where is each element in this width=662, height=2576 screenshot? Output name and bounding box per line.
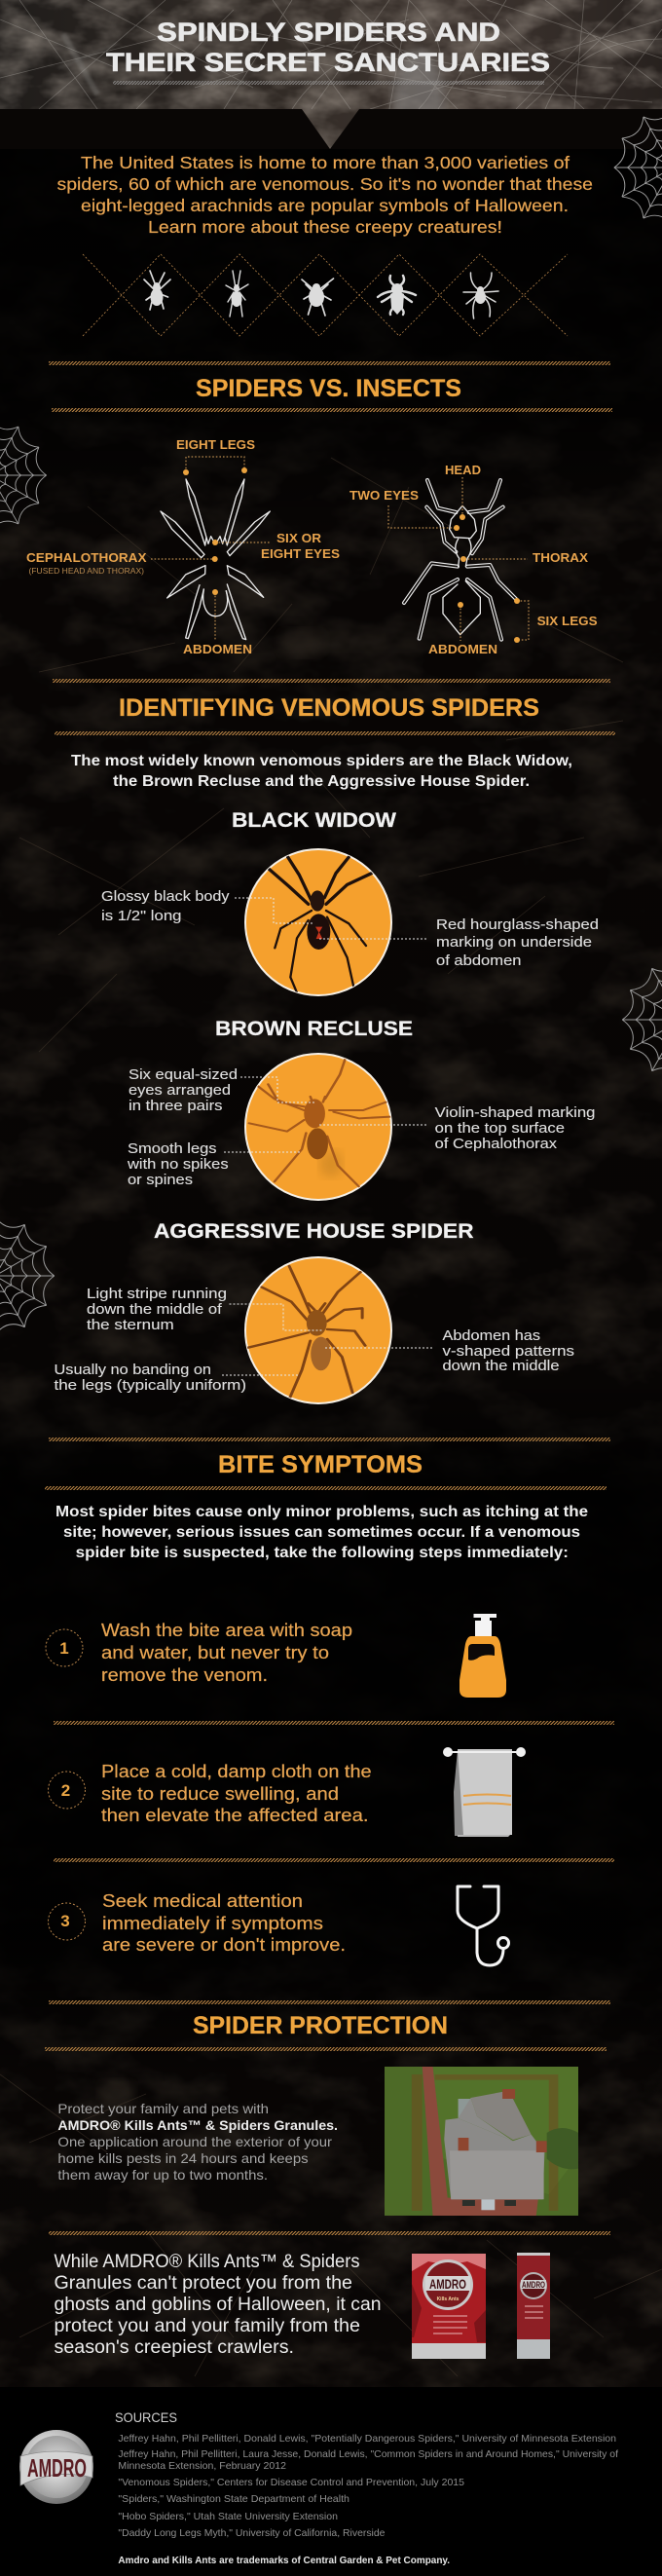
spider labels: (FUSED HEAD AND THORAX)	[29, 566, 144, 576]
ant labels	[349, 464, 598, 656]
callout: body: is 1/2" long	[101, 909, 181, 924]
step 2 text: Place a cold, damp cloth on the	[101, 1761, 372, 1781]
callout: hourglass: of abdomen	[436, 953, 522, 969]
sources list: "Spiders," Washington State Department of Health	[118, 2493, 349, 2505]
callout: legs: or spines	[128, 1173, 193, 1188]
callout: abdomen: down the middle	[442, 1359, 559, 1374]
header cobweb photo	[0, 0, 662, 156]
number badge 3: 3	[60, 1912, 70, 1930]
sources list: "Daddy Long Legs Myth," University of California, Riverside	[118, 2527, 386, 2539]
panel: black widow	[101, 809, 599, 995]
icon: spider 3	[302, 279, 333, 316]
trademark note: Amdro and Kills Ants are trademarks of Central Garden & Pet Company.	[118, 2555, 450, 2566]
icon: spider 5	[463, 273, 498, 318]
title	[106, 18, 550, 77]
product: granules bag: AMDRO	[429, 2276, 466, 2292]
step 1	[46, 1614, 506, 1698]
spider labels: SIX OR	[276, 532, 321, 545]
step 2	[49, 1747, 526, 1837]
intro text: Learn more about these creepy creatures!	[148, 217, 502, 237]
sources list: Jeffrey Hahn, Phil Pellitteri, Laura Jesse, Donald Lewis, "Common Spiders in and Around Homes," University of	[118, 2448, 618, 2460]
callout: violin marking: on the top surface	[435, 1121, 565, 1137]
callout: abdomen	[442, 1328, 574, 1374]
ant labels: THORAX	[533, 551, 589, 565]
icon: soap bottle	[460, 1614, 506, 1698]
callout: violin marking: of Cephalothorax	[435, 1137, 558, 1152]
sources list: SOURCES	[115, 2409, 177, 2425]
step 3	[49, 1886, 508, 1965]
callout: stripe	[87, 1287, 227, 1333]
callout: banding: Usually no banding on	[55, 1363, 211, 1378]
ant labels: HEAD	[445, 464, 481, 477]
sources list: "Venomous Spiders," Centers for Disease Control and Prevention, July 2015	[118, 2477, 464, 2488]
photo: black widow in circle	[245, 849, 391, 995]
argyle spider icon row	[83, 254, 568, 336]
venomous spiders intro: the Brown Recluse and the Aggressive House Spider.	[113, 773, 530, 790]
intro text	[56, 153, 593, 237]
icon: stethoscope	[458, 1886, 508, 1965]
heading: identifying venomous spiders: IDENTIFYING VENOMOUS SPIDERS	[119, 694, 539, 722]
sources list: Minnesota Extension, February 2012	[118, 2460, 286, 2472]
step 3 text: Seek medical attention	[102, 1890, 303, 1911]
step 2 text	[101, 1761, 372, 1825]
bite symptoms intro: Most spider bites cause only minor problems, such as itching at the	[55, 1504, 588, 1520]
product: shaker canister: AMDRO	[522, 2280, 545, 2290]
closing message	[55, 2252, 382, 2358]
spider labels: EIGHT EYES	[261, 547, 340, 561]
aerial house photo	[385, 2067, 578, 2216]
venomous spiders intro	[71, 753, 572, 790]
bite symptoms intro: site; however, serious issues can sometimes occur. If a venomous	[63, 1524, 580, 1541]
leader lines	[222, 1304, 434, 1375]
callout: abdomen: Abdomen has	[442, 1328, 540, 1344]
title: SPINDLY SPIDERS AND	[157, 18, 500, 47]
heading: black widow: BLACK WIDOW	[232, 809, 396, 832]
callout: eyes: Six equal-sized	[129, 1067, 238, 1083]
closing message: ghosts and goblins of Halloween, it can	[55, 2295, 382, 2315]
sources list: Jeffrey Hahn, Phil Pellitteri, Donald Lewis, "Potentially Dangerous Spiders," University of Minnesota Extension	[118, 2433, 616, 2445]
photo: house spider in circle	[242, 1257, 391, 1403]
heading: spider protection: SPIDER PROTECTION	[193, 2012, 448, 2039]
heading: spiders vs insects: SPIDERS VS. INSECTS	[196, 375, 461, 402]
closing message: Granules can't protect you from the	[55, 2273, 352, 2294]
closing message: season's creepiest crawlers.	[55, 2337, 294, 2358]
intro text: eight-legged arachnids are popular symbols of Halloween.	[81, 196, 569, 215]
heading: brown recluse: BROWN RECLUSE	[215, 1018, 413, 1040]
number badge 1	[46, 1629, 83, 1666]
number badge 2	[49, 1772, 86, 1809]
bite symptoms intro: spider bite is suspected, take the following steps immediately:	[76, 1545, 569, 1561]
intro text: The United States is home to more than 3,000 varieties of	[81, 153, 570, 172]
intro text: spiders, 60 of which are venomous. So it's no wonder that these	[56, 174, 593, 194]
protection text	[57, 2101, 338, 2183]
protection text: AMDRO® Kills Ants™ & Spiders Granules.	[57, 2117, 338, 2133]
callout: violin marking: Violin-shaped marking	[435, 1105, 595, 1121]
callout: stripe: Light stripe running	[87, 1287, 227, 1302]
icon: spider 2	[226, 271, 248, 317]
step 1 text	[101, 1620, 352, 1685]
step 1 text: and water, but never try to	[101, 1642, 329, 1662]
spider labels: EIGHT LEGS	[176, 438, 255, 452]
step 2 text: site to reduce swelling, and	[101, 1783, 339, 1804]
callout: hourglass	[436, 917, 599, 969]
callout: legs: Smooth legs	[128, 1141, 216, 1157]
step 1 text: Wash the bite area with soap	[101, 1620, 352, 1640]
photo: brown recluse in circle	[245, 1054, 391, 1200]
callout: stripe: the sternum	[87, 1318, 174, 1333]
ant labels: SIX LEGS	[537, 615, 598, 628]
ant leader lines	[388, 477, 529, 641]
product: granules bag: Kills Ants	[437, 2296, 460, 2302]
callout: eyes: eyes arranged	[129, 1083, 231, 1099]
icon: spider 1	[144, 271, 170, 310]
closing message: protect you and your family from the	[55, 2316, 360, 2336]
closing message: While AMDRO® Kills Ants™ & Spiders	[55, 2252, 360, 2272]
step 3 text	[102, 1890, 346, 1955]
sources list	[115, 2409, 618, 2539]
callout: eyes: in three pairs	[129, 1099, 222, 1114]
callout: stripe: down the middle of	[87, 1302, 223, 1318]
callout: violin marking	[435, 1105, 595, 1152]
number badge 3	[49, 1903, 86, 1940]
callout: legs: with no spikes	[127, 1157, 229, 1173]
product: granules bag	[412, 2254, 486, 2359]
cobwebs on page edges	[0, 102, 662, 1342]
callout: abdomen: v-shaped patterns	[442, 1344, 574, 1360]
protection text: home kills pests in 24 hours and keeps	[57, 2150, 309, 2166]
AMDRO logo	[19, 2430, 93, 2504]
heading: aggressive house spider: AGGRESSIVE HOUSE SPIDER	[154, 1220, 473, 1243]
title: THEIR SECRET SANCTUARIES	[106, 48, 550, 77]
step 3 text: immediately if symptoms	[102, 1913, 323, 1933]
protection text: One application around the exterior of your	[57, 2134, 332, 2149]
insect anatomy diagram	[349, 464, 598, 656]
spider labels: CEPHALOTHORAX	[26, 551, 147, 565]
protection text: them away for up to two months.	[57, 2167, 268, 2183]
callout: banding	[55, 1363, 246, 1394]
spider leader lines	[151, 457, 270, 640]
ant labels: TWO EYES	[349, 489, 419, 503]
step 3 text: are severe or don't improve.	[102, 1934, 346, 1955]
sources list: "Hobo Spiders," Utah State University Extension	[118, 2511, 338, 2522]
ant labels: ABDOMEN	[428, 643, 497, 656]
callout: body	[101, 889, 230, 924]
bite symptoms intro	[55, 1504, 588, 1561]
panel: aggressive house spider	[55, 1220, 574, 1403]
callout: eyes	[129, 1067, 238, 1114]
callout: legs	[127, 1141, 229, 1188]
step 1 text: remove the venom.	[101, 1664, 268, 1685]
number badge 1: 1	[59, 1639, 69, 1658]
icon: spider 4	[378, 276, 416, 315]
callout: body: Glossy black body	[101, 889, 230, 905]
number badge 2: 2	[61, 1781, 70, 1800]
panel: brown recluse	[127, 1018, 595, 1200]
leader lines	[224, 1077, 427, 1152]
protection text: Protect your family and pets with	[57, 2101, 269, 2116]
callout: hourglass: Red hourglass-shaped	[436, 917, 599, 933]
leader lines	[235, 898, 428, 939]
callout: hourglass: marking on underside	[436, 935, 592, 951]
product: shaker canister	[517, 2253, 550, 2359]
icon: towel on rod	[443, 1747, 526, 1837]
spider anatomy diagram	[26, 438, 340, 656]
venomous spiders intro: The most widely known venomous spiders are the Black Widow,	[71, 753, 572, 769]
footer band	[0, 2387, 662, 2576]
spider outline	[161, 479, 270, 640]
ant outline	[404, 480, 518, 640]
callout: banding: the legs (typically uniform)	[55, 1378, 246, 1394]
AMDRO logo: AMDRO	[27, 2453, 87, 2483]
spider labels	[26, 438, 340, 656]
step 2 text: then elevate the affected area.	[101, 1805, 369, 1825]
spider labels: ABDOMEN	[183, 643, 252, 656]
heading: bite symptoms: BITE SYMPTOMS	[218, 1451, 423, 1478]
